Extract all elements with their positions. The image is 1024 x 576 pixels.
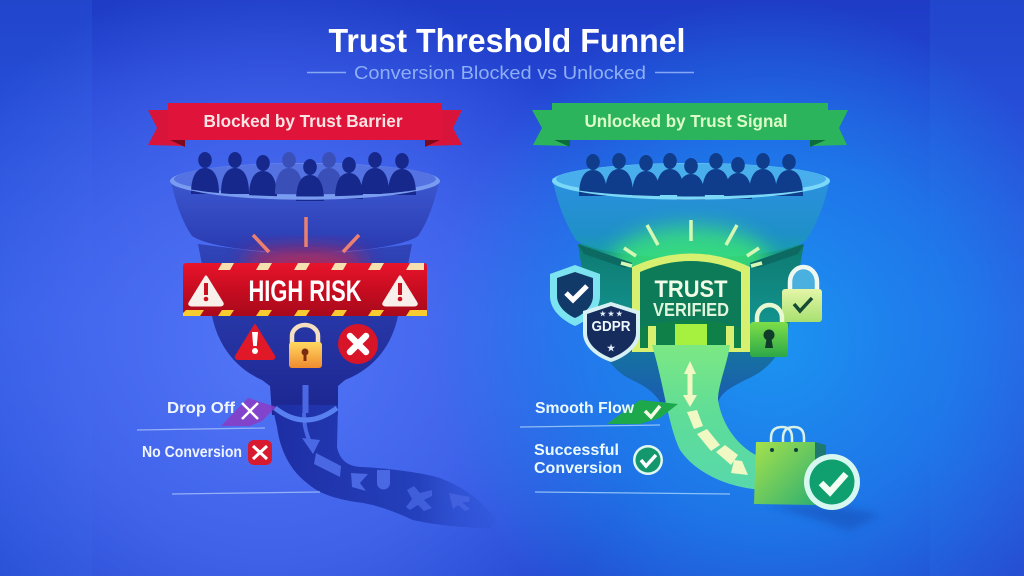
crowd silhouettes <box>579 153 803 200</box>
title: Trust Threshold Funnel <box>328 22 686 59</box>
green glow <box>611 226 771 298</box>
left divider lines <box>137 428 320 494</box>
label: successful conversion <box>534 442 663 477</box>
flow arrows <box>683 361 748 475</box>
rim lip over crowd <box>170 181 440 200</box>
subtitle with rules: Conversion Blocked vs Unlocked <box>354 63 646 83</box>
neck ring <box>275 408 337 420</box>
green flow <box>652 345 762 490</box>
warning icon left <box>190 277 222 305</box>
icon: x circle <box>338 324 378 364</box>
high risk banner <box>183 263 427 316</box>
icon: shield check <box>550 265 600 326</box>
icon: green padlock <box>750 305 788 357</box>
green ribbon heading <box>532 103 848 147</box>
lower cone and neck <box>198 244 412 415</box>
panel: unlocked funnel <box>532 103 880 530</box>
label: no conversion <box>142 440 272 465</box>
label: smooth flow: Smooth Flow <box>535 400 635 417</box>
label: successful conversion: Conversion <box>534 460 622 477</box>
rim lip over crowd <box>552 181 830 200</box>
label: smooth flow <box>535 400 678 424</box>
icon: gdpr badge: ★ ★ ★ <box>600 310 623 318</box>
crowd silhouettes <box>191 152 416 201</box>
warning rays <box>253 217 359 252</box>
trust verified gate <box>632 254 750 352</box>
icon: alert triangle <box>236 325 274 359</box>
panel: blocked funnel <box>142 103 496 528</box>
label: drop off <box>167 398 276 426</box>
icon: gdpr badge: GDPR <box>592 318 631 335</box>
high risk banner: HIGH RISK <box>248 275 362 308</box>
icon: gdpr badge <box>583 302 640 362</box>
trust gate wings <box>578 244 804 348</box>
label: successful conversion: Successful <box>534 442 619 459</box>
red glow <box>243 250 367 274</box>
icon: light padlock <box>782 267 822 322</box>
warning icon right <box>384 277 416 305</box>
funnel bowl <box>552 178 830 258</box>
blocked path markers <box>302 385 470 511</box>
funnel bowl <box>170 178 440 252</box>
label: no conversion: No Conversion <box>142 444 242 461</box>
green ribbon heading: Unlocked by Trust Signal <box>584 111 788 131</box>
trust verified gate: VERIFIED <box>653 300 729 320</box>
funnel rim <box>170 163 440 199</box>
red ribbon heading <box>148 103 462 147</box>
lower cone <box>578 244 804 402</box>
trust verified gate: TRUST <box>654 276 728 303</box>
icon: shopping bag <box>754 427 880 530</box>
blocked tube <box>272 405 496 528</box>
funnel rim <box>552 163 830 199</box>
glow rays <box>621 220 762 266</box>
icon: padlock <box>289 325 322 368</box>
label: drop off: Drop Off <box>167 400 236 417</box>
red ribbon heading: Blocked by Trust Barrier <box>204 111 403 131</box>
icon: gdpr badge: ★ <box>607 343 616 353</box>
right divider lines <box>520 425 730 494</box>
